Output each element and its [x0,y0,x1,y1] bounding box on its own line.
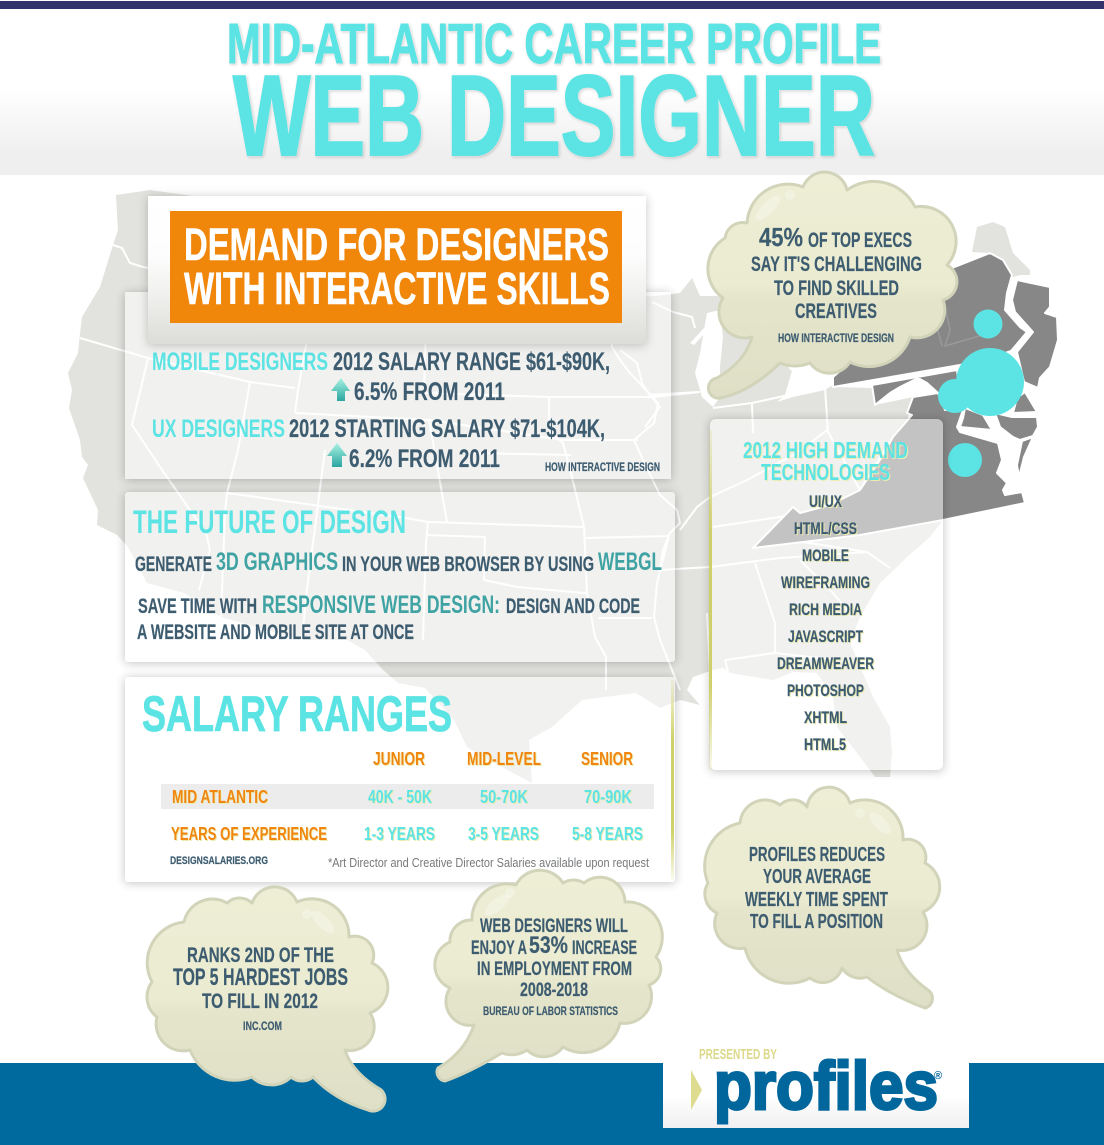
responsive design lines: DESIGN AND CODE [506,595,640,618]
technologies heading: 2012 HIGH DEMAND [743,437,908,463]
top bar [0,1,1104,9]
UX designers stat: 2012 STARTING SALARY $71-$104K, [289,415,605,443]
technologies list: MOBILE [802,546,849,565]
mobile designers stat: 6.5% FROM 2011 [354,378,505,406]
webgl line: WEBGL [598,548,662,576]
callout: profiles reduces time to fill: PROFILES REDUCES [749,844,885,866]
callout: profiles reduces time to fill: WEEKLY TIME SPENT [745,889,888,911]
technologies list: PHOTOSHOP [787,681,864,700]
map: mid-atlantic highlighted states [753,253,1058,548]
callout: profiles reduces time to fill: YOUR AVERAGE [763,866,871,888]
salary footnote: *Art Director and Creative Director Salaries available upon request [328,856,649,870]
callout: 45 percent of top execs: 45% [759,222,803,252]
callout: 53 percent employment increase: BUREAU OF LABOR STATISTICS [483,1006,618,1018]
mobile designers stat [152,348,610,406]
future heading: THE FUTURE OF DESIGN [133,504,406,540]
callout: 45 percent of top execs: OF TOP EXECS [808,229,912,252]
salary table: 3-5 YEARS [468,824,539,844]
webgl line: 3D GRAPHICS [216,548,338,576]
icon: logo chevron [691,1070,702,1110]
salary table: SENIOR [581,749,633,769]
salary table: 40K - 50K [368,787,432,807]
title [227,12,881,180]
salary heading: SALARY RANGES [142,686,452,742]
callout: 53 percent employment increase: 2008-2018 [520,979,588,1001]
callout: ranks 2nd hardest job: RANKS 2ND OF THE [187,944,334,967]
panel: demand heading [148,196,646,344]
profiles wordmark: profiles [714,1048,938,1124]
UX designers stat [152,415,605,473]
UX designers stat: 6.2% FROM 2011 [349,445,500,473]
callout: 45 percent of top execs: CREATIVES [795,300,877,323]
salary table [161,749,654,844]
panel: high demand technologies [709,419,943,770]
callout: 53 percent employment increase: WEB DESIGNERS WILL [480,915,628,937]
callout: 53 percent employment increase [435,870,662,1081]
panel: demand stats [125,292,671,479]
technologies list: UI/UX [809,492,842,511]
webgl line: IN YOUR WEB BROWSER BY USING [342,553,594,576]
technologies list: XHTML [804,708,847,727]
callout: ranks 2nd hardest job: TOP 5 HARDEST JOBS [173,964,348,991]
panel: demand heading: WITH INTERACTIVE SKILLS [184,263,610,314]
technologies list: HTML/CSS [794,519,857,538]
mobile designers stat: 2012 SALARY RANGE $61-$90K, [333,348,610,376]
title: WEB DESIGNER [233,53,875,180]
callout: ranks 2nd hardest job [147,887,388,1111]
mobile designers stat: MOBILE DESIGNERS [152,348,328,376]
source: how interactive design: HOW INTERACTIVE DESIGN [545,462,660,474]
salary table: MID ATLANTIC [172,787,268,807]
header background [0,0,1104,175]
webgl line: GENERATE [135,553,212,576]
callout: 53 percent employment increase: ENJOY A [471,937,527,959]
panel: the future of design [125,492,675,662]
salary table: 70-90K [584,787,632,807]
panel: salary ranges [125,677,675,882]
salary table: 1-3 YEARS [364,824,435,844]
responsive design lines: A WEBSITE AND MOBILE SITE AT ONCE [137,621,414,644]
footer band [0,1063,1104,1145]
responsive design lines [137,591,640,644]
salary table: MID-LEVEL [467,749,541,769]
registered mark: ® [934,1070,942,1082]
salary table: 5-8 YEARS [572,824,643,844]
map: state lines inside highlight [930,282,1000,346]
salary table: 50-70K [480,787,528,807]
profiles logo block [663,1046,969,1128]
panel shadows [125,293,943,883]
responsive design lines: RESPONSIVE WEB DESIGN: [262,591,500,619]
UX designers stat: UX DESIGNERS [152,415,285,443]
panel: demand heading: DEMAND FOR DESIGNERS [184,219,609,270]
technologies heading: TECHNOLOGIES [761,459,890,485]
technologies list: WIREFRAMING [781,573,870,592]
technologies list: DREAMWEAVER [777,654,874,673]
callout: ranks 2nd hardest job: TO FILL IN 2012 [202,990,318,1013]
map of the United States [68,190,1030,783]
callout: 53 percent employment increase: IN EMPLOYMENT FROM [477,958,632,980]
callout: ranks 2nd hardest job: INC.COM [243,1021,282,1033]
webgl line [135,548,662,576]
technologies list: HTML5 [804,735,846,754]
technologies list [777,492,874,754]
map: location circles [938,310,1024,477]
callout: profiles reduces time to fill: TO FILL A POSITION [750,911,883,933]
callout: 45 percent of top execs: SAY IT'S CHALLENGING [751,253,922,276]
salary source: DESIGNSALARIES.ORG [170,855,268,867]
callout: 53 percent employment increase: INCREASE [572,937,637,959]
responsive design lines: SAVE TIME WITH [138,595,257,618]
salary table: YEARS OF EXPERIENCE [171,824,327,844]
callout: 45 percent of top execs: HOW INTERACTIVE DESIGN [778,333,894,345]
presented by label: PRESENTED BY [699,1046,777,1063]
salary table: JUNIOR [373,749,425,769]
callout: profiles reduces time to fill [705,787,940,1008]
callout: 45 percent of top execs: TO FIND SKILLED [774,277,899,300]
technologies list: RICH MEDIA [789,600,862,619]
callout: 53 percent employment increase: 53% [529,932,568,959]
technologies heading [743,437,908,485]
technologies list: JAVASCRIPT [788,627,863,646]
callout: 45 percent of top execs [708,172,957,398]
